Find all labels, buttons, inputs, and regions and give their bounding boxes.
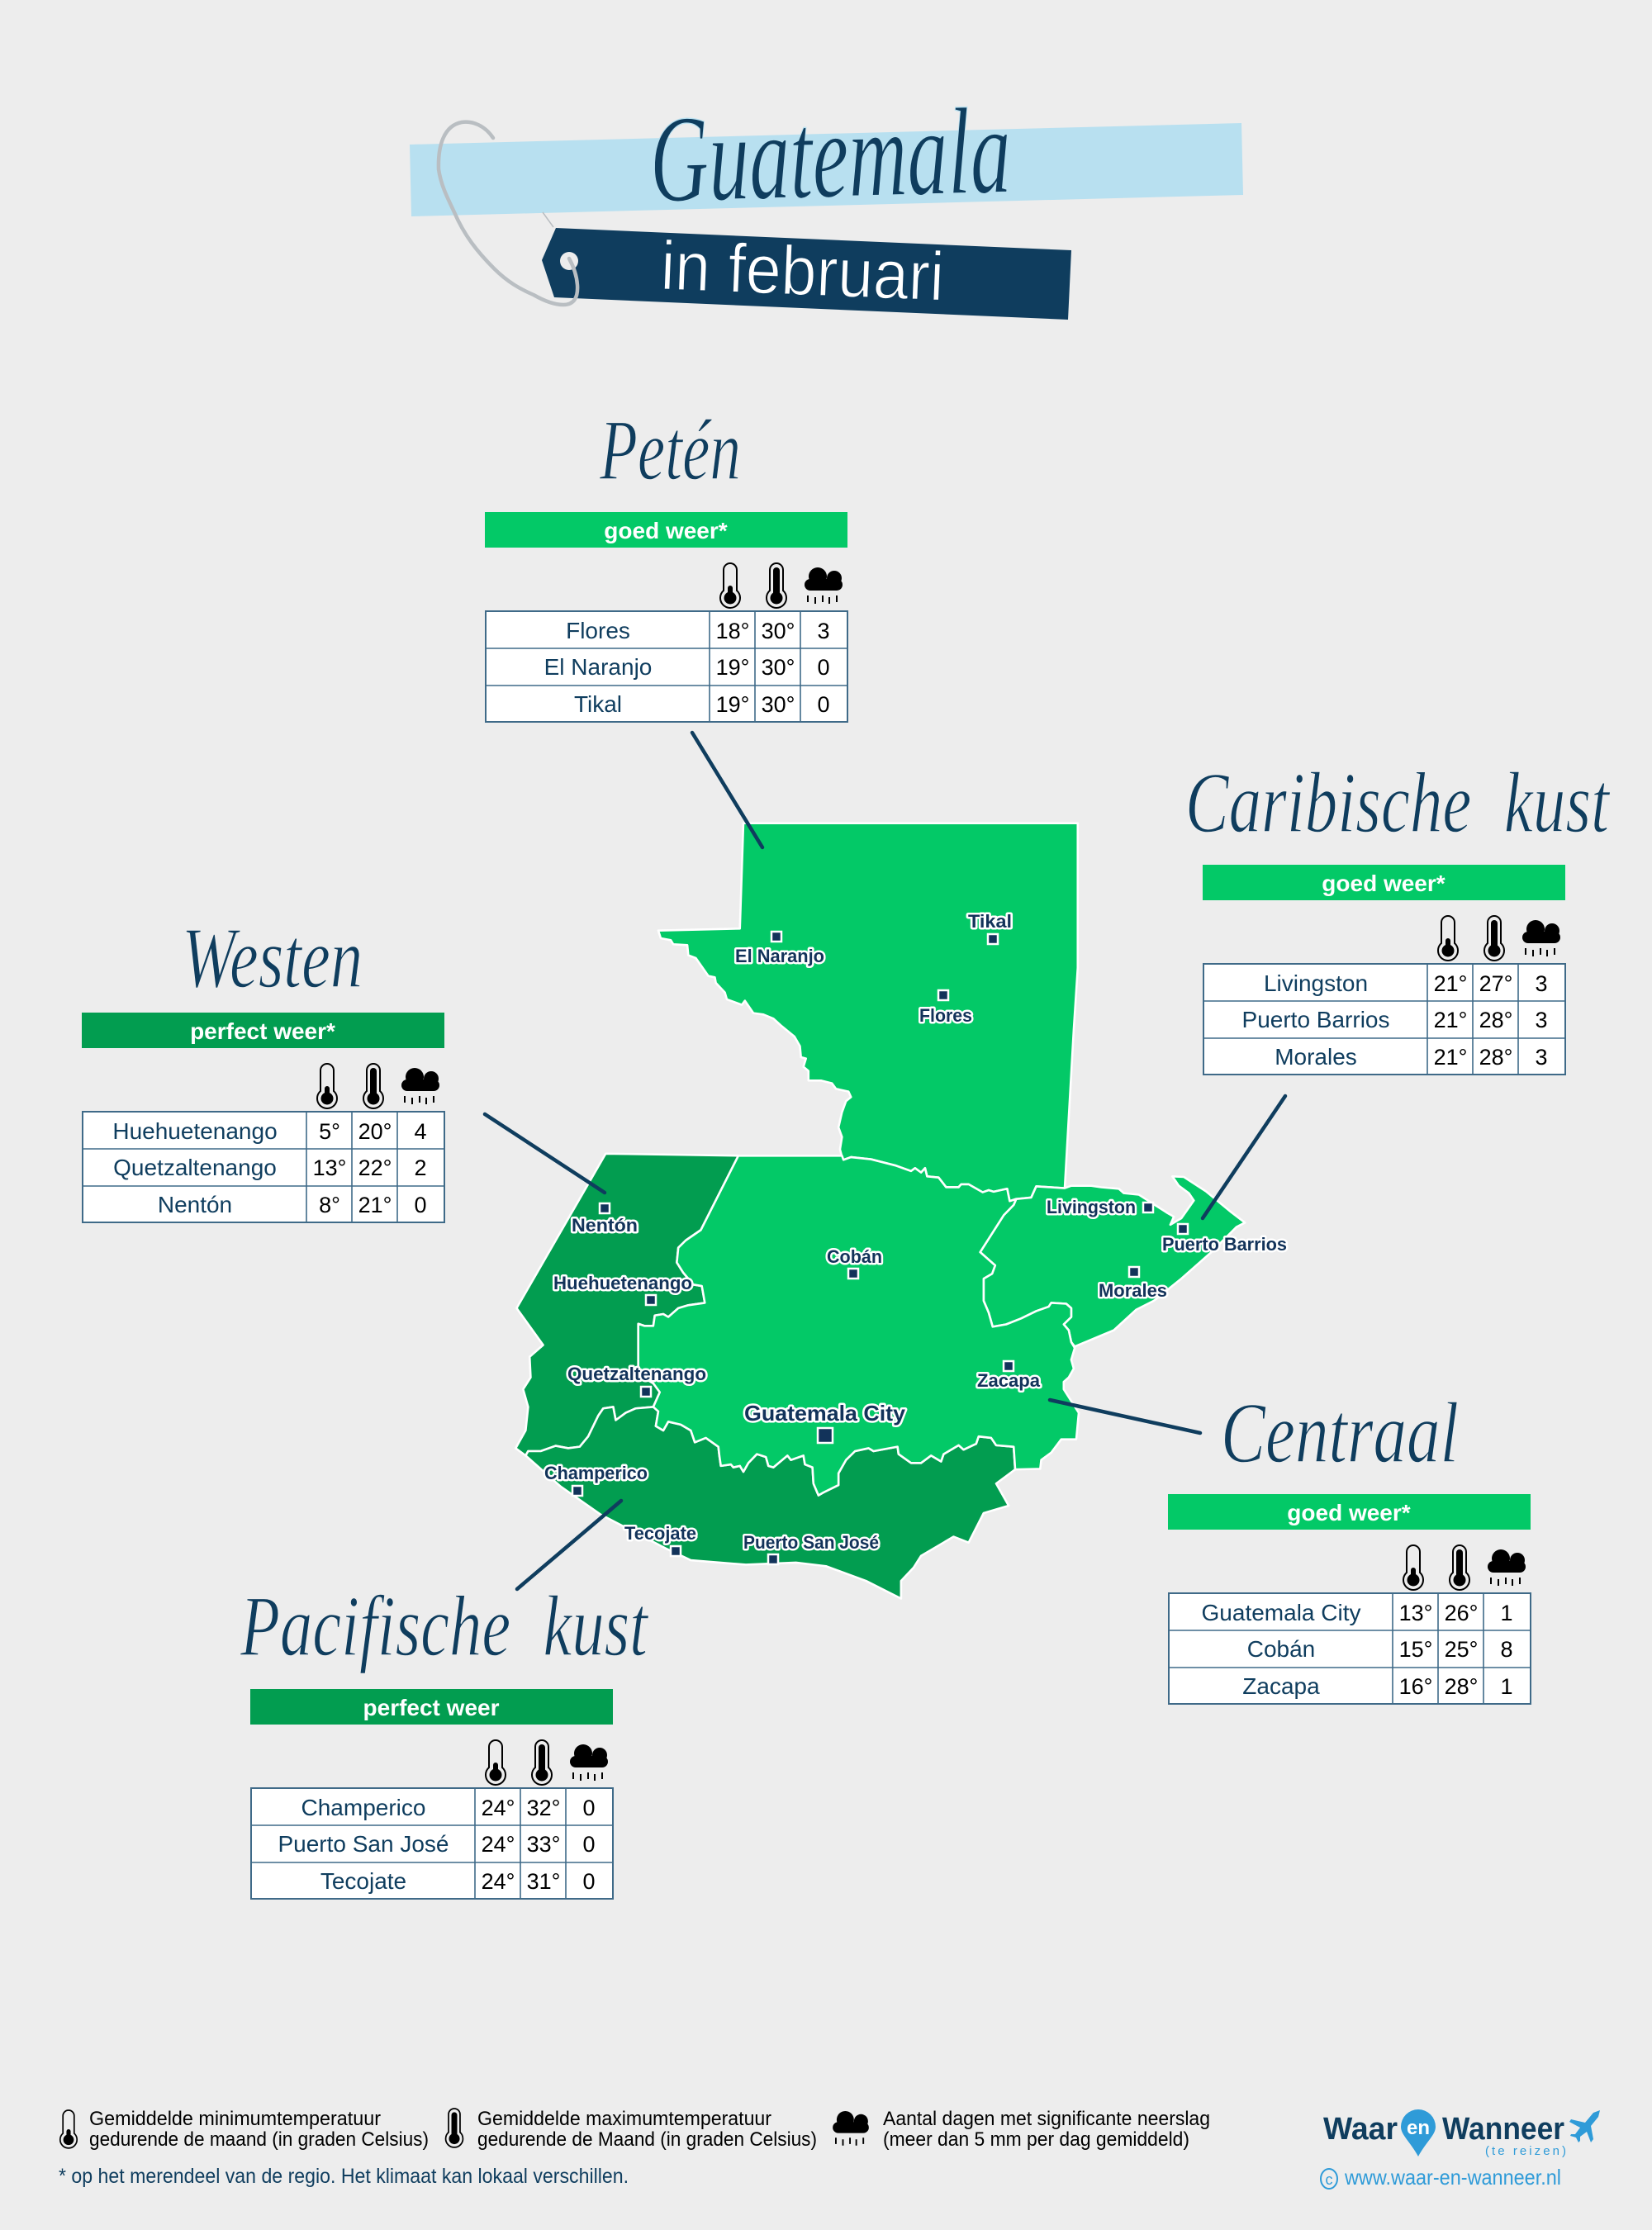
weather table: 0 xyxy=(582,1869,596,1894)
legend text: minimum temperature: Gemiddelde minimumtemperatuur xyxy=(89,2108,381,2130)
city: Tecojate xyxy=(624,1523,696,1556)
city: Guatemala City xyxy=(744,1401,906,1443)
weather table: 0 xyxy=(414,1193,427,1217)
map of Guatemala xyxy=(515,823,1287,1599)
connector line: Caribische kust xyxy=(1203,1096,1285,1218)
region: Caribische kust xyxy=(980,1176,1245,1346)
weather table: 16° xyxy=(1399,1674,1432,1699)
weather table: 26° xyxy=(1445,1601,1478,1625)
heading: Petén xyxy=(599,401,741,498)
connector line: Pacifische kust xyxy=(517,1501,621,1589)
wordmark left: Waar xyxy=(1323,2112,1398,2147)
weather table: 19° xyxy=(716,655,749,680)
legend xyxy=(59,2108,1210,2188)
connector line: Petén xyxy=(692,733,762,847)
weather table: El Naranjo xyxy=(544,654,652,680)
weather table: 3 xyxy=(817,619,830,643)
icon: maximum temperature xyxy=(1484,916,1504,961)
icon: airplane xyxy=(1569,2110,1600,2142)
weather table: 20° xyxy=(358,1119,392,1144)
icon: maximum temperature xyxy=(767,563,786,608)
city: Quetzaltenango: Quetzaltenango xyxy=(567,1364,706,1384)
icon: location pin xyxy=(1401,2109,1436,2156)
weather table: 21° xyxy=(358,1193,392,1217)
weather table xyxy=(1203,964,1565,1075)
weather table: 30° xyxy=(762,655,795,680)
city: Guatemala City: Guatemala City xyxy=(744,1401,906,1426)
weather table: 13° xyxy=(1399,1601,1432,1625)
weather table: 18° xyxy=(716,619,749,643)
weather table: 30° xyxy=(762,692,795,717)
weather table: Nentón xyxy=(158,1192,232,1217)
legend text: precipitation: Aantal dagen met significante neerslag xyxy=(883,2108,1210,2130)
city: El Naranjo: El Naranjo xyxy=(735,946,824,966)
weather table: Tecojate xyxy=(320,1868,406,1894)
city: Cobán xyxy=(827,1246,882,1279)
legend text: maximum temperature: Gemiddelde maximumtemperatuur xyxy=(477,2108,771,2130)
city: Champerico xyxy=(544,1463,648,1496)
weather table: 28° xyxy=(1479,1008,1512,1032)
panel: Centraal xyxy=(1168,1384,1531,1704)
legend text: maximum temperature: gedurende de Maand (in graden Celsius) xyxy=(477,2128,817,2151)
city: El Naranjo xyxy=(735,932,824,966)
city: Zacapa: Zacapa xyxy=(977,1370,1041,1391)
city: Puerto San José: Puerto San José xyxy=(743,1532,879,1553)
weather table: Tikal xyxy=(574,691,622,717)
connector line: Westen xyxy=(485,1114,605,1193)
weather table: 21° xyxy=(1434,1045,1467,1070)
weather table: 2 xyxy=(414,1155,427,1180)
icon: maximum temperature xyxy=(532,1740,552,1785)
city: Flores: Flores xyxy=(919,1005,972,1026)
icon: location pin: en xyxy=(1407,2117,1430,2139)
weather table: Quetzaltenango xyxy=(113,1155,277,1180)
icon: rain cloud xyxy=(570,1744,608,1781)
legend text: precipitation xyxy=(883,2108,1210,2151)
rating banner xyxy=(82,1013,444,1048)
connector line: Centraal xyxy=(1050,1400,1200,1433)
rating banner: goed weer* xyxy=(1322,871,1446,896)
weather table: 28° xyxy=(1445,1674,1478,1699)
weather table: 5° xyxy=(319,1119,340,1144)
icon: rain cloud xyxy=(805,567,843,604)
weather table: 0 xyxy=(582,1832,596,1857)
city: Nentón xyxy=(572,1203,638,1236)
logo: Waar en Wanneer xyxy=(1321,2109,1600,2190)
heading: Westen xyxy=(182,909,363,1006)
city: Zacapa xyxy=(977,1361,1041,1391)
weather table: 25° xyxy=(1445,1637,1478,1662)
weather table: 1 xyxy=(1500,1601,1513,1625)
weather table: 15° xyxy=(1399,1637,1432,1662)
weather table xyxy=(486,611,847,722)
city: Puerto Barrios xyxy=(1162,1224,1287,1255)
legend text: precipitation: (meer dan 5 mm per dag gemiddeld) xyxy=(883,2128,1189,2151)
weather table: Flores xyxy=(566,618,630,643)
rating banner: goed weer* xyxy=(1287,1500,1411,1525)
weather table: 3 xyxy=(1535,1045,1548,1070)
city: Nentón: Nentón xyxy=(572,1215,638,1236)
weather table: 0 xyxy=(817,655,830,680)
city: Cobán: Cobán xyxy=(827,1246,882,1267)
rating banner xyxy=(485,512,847,548)
weather table: 0 xyxy=(582,1796,596,1820)
wordmark right: Wanneer xyxy=(1442,2112,1564,2147)
weather table: 3 xyxy=(1535,971,1548,996)
weather table: Huehuetenango xyxy=(112,1118,278,1144)
weather table: 21° xyxy=(1434,1008,1467,1032)
icon: minimum temperature xyxy=(60,2110,77,2148)
city: Flores xyxy=(919,990,972,1026)
city: Huehuetenango: Huehuetenango xyxy=(553,1273,692,1293)
panel: Caribische kust xyxy=(1185,754,1611,1075)
legend text: maximum temperature xyxy=(477,2108,817,2151)
icon: minimum temperature xyxy=(486,1740,506,1785)
weather table: Puerto Barrios xyxy=(1242,1007,1389,1032)
legend text: minimum temperature: gedurende de maand (in graden Celsius) xyxy=(89,2128,429,2151)
icon: minimum temperature xyxy=(1438,916,1458,961)
weather table: 31° xyxy=(527,1869,560,1894)
weather table: 13° xyxy=(313,1155,346,1180)
region: Petén xyxy=(658,823,1078,1201)
title band xyxy=(410,123,1243,216)
weather table: 22° xyxy=(358,1155,392,1180)
subheading: in februari: in februari xyxy=(659,226,946,316)
rating banner xyxy=(1168,1494,1531,1530)
city: Puerto San José xyxy=(743,1532,879,1564)
weather table: Puerto San José xyxy=(278,1831,449,1857)
weather table: 33° xyxy=(527,1832,560,1857)
icon: minimum temperature xyxy=(720,563,740,608)
weather table: 3 xyxy=(1535,1008,1548,1032)
tag thin string xyxy=(543,212,553,227)
weather table: 32° xyxy=(527,1796,560,1820)
icon: rain cloud xyxy=(833,2111,869,2146)
region: Westen xyxy=(515,1154,738,1455)
rating banner: perfect weer xyxy=(363,1695,500,1720)
tag hole xyxy=(560,252,578,270)
city: Morales: Morales xyxy=(1099,1280,1167,1301)
rating banner xyxy=(1203,865,1565,900)
weather table xyxy=(1169,1593,1531,1704)
icon: rain cloud xyxy=(1488,1549,1526,1586)
icon: copyright xyxy=(1321,2169,1337,2189)
weather table: 30° xyxy=(762,619,795,643)
rating banner: perfect weer* xyxy=(190,1018,335,1044)
city: Livingston: Livingston xyxy=(1047,1197,1136,1217)
icon: minimum temperature xyxy=(1403,1545,1423,1590)
weather table xyxy=(251,1788,613,1899)
panel: Petén xyxy=(485,401,847,722)
website: www.waar-en-wanneer.nl xyxy=(1344,2165,1561,2190)
city: Puerto Barrios: Puerto Barrios xyxy=(1162,1234,1287,1255)
rating banner xyxy=(250,1689,613,1725)
tagline: (te reizen) xyxy=(1485,2144,1566,2158)
tag xyxy=(542,228,1071,320)
weather table: 24° xyxy=(482,1796,515,1820)
weather table xyxy=(83,1112,444,1222)
city: Tikal: Tikal xyxy=(968,911,1012,932)
weather table: 24° xyxy=(482,1869,515,1894)
heading: Centraal xyxy=(1221,1384,1459,1481)
panel: Westen xyxy=(82,909,444,1222)
city: Tecojate: Tecojate xyxy=(624,1523,696,1544)
icon: rain cloud xyxy=(401,1068,439,1104)
weather table: 27° xyxy=(1479,971,1512,996)
icon: maximum temperature xyxy=(1450,1545,1469,1590)
weather table: 0 xyxy=(817,692,830,717)
weather table: 28° xyxy=(1479,1045,1512,1070)
icon: copyright: c xyxy=(1325,2171,1333,2188)
weather table: 21° xyxy=(1434,971,1467,996)
icon: minimum temperature xyxy=(317,1064,337,1108)
city: Quetzaltenango xyxy=(567,1364,706,1397)
city: Tikal xyxy=(968,911,1012,944)
weather table: Morales xyxy=(1275,1044,1357,1070)
weather table: Cobán xyxy=(1247,1636,1315,1662)
city: Huehuetenango xyxy=(553,1273,692,1305)
weather table: 24° xyxy=(482,1832,515,1857)
icon: maximum temperature xyxy=(363,1064,383,1108)
city: Morales xyxy=(1099,1267,1167,1301)
weather table: 4 xyxy=(414,1119,427,1144)
heading: Pacifische kust xyxy=(240,1578,649,1674)
rating banner: goed weer* xyxy=(604,518,728,543)
footnote: * op het merendeel van de regio. Het klimaat kan lokaal verschillen. xyxy=(59,2165,629,2188)
icon: rain cloud xyxy=(1522,920,1560,956)
weather table: 19° xyxy=(716,692,749,717)
panel: Pacifische kust xyxy=(240,1578,649,1899)
title: Guatemala in februari xyxy=(410,82,1243,320)
weather table: 8 xyxy=(1500,1637,1513,1662)
weather table: Champerico xyxy=(301,1795,425,1820)
icon: maximum temperature xyxy=(446,2109,463,2147)
weather table: 8° xyxy=(319,1193,340,1217)
heading: Guatemala: Guatemala xyxy=(648,82,1013,229)
region: Centraal xyxy=(638,1155,1079,1496)
weather table: 1 xyxy=(1500,1674,1513,1699)
legend text: minimum temperature xyxy=(89,2108,429,2151)
grey string loop xyxy=(439,122,577,305)
weather table: Livingston xyxy=(1264,970,1368,996)
region: Pacifische kust xyxy=(525,1407,1015,1599)
weather table: Guatemala City xyxy=(1202,1600,1360,1625)
city: Champerico: Champerico xyxy=(544,1463,648,1483)
weather table: Zacapa xyxy=(1242,1673,1320,1699)
